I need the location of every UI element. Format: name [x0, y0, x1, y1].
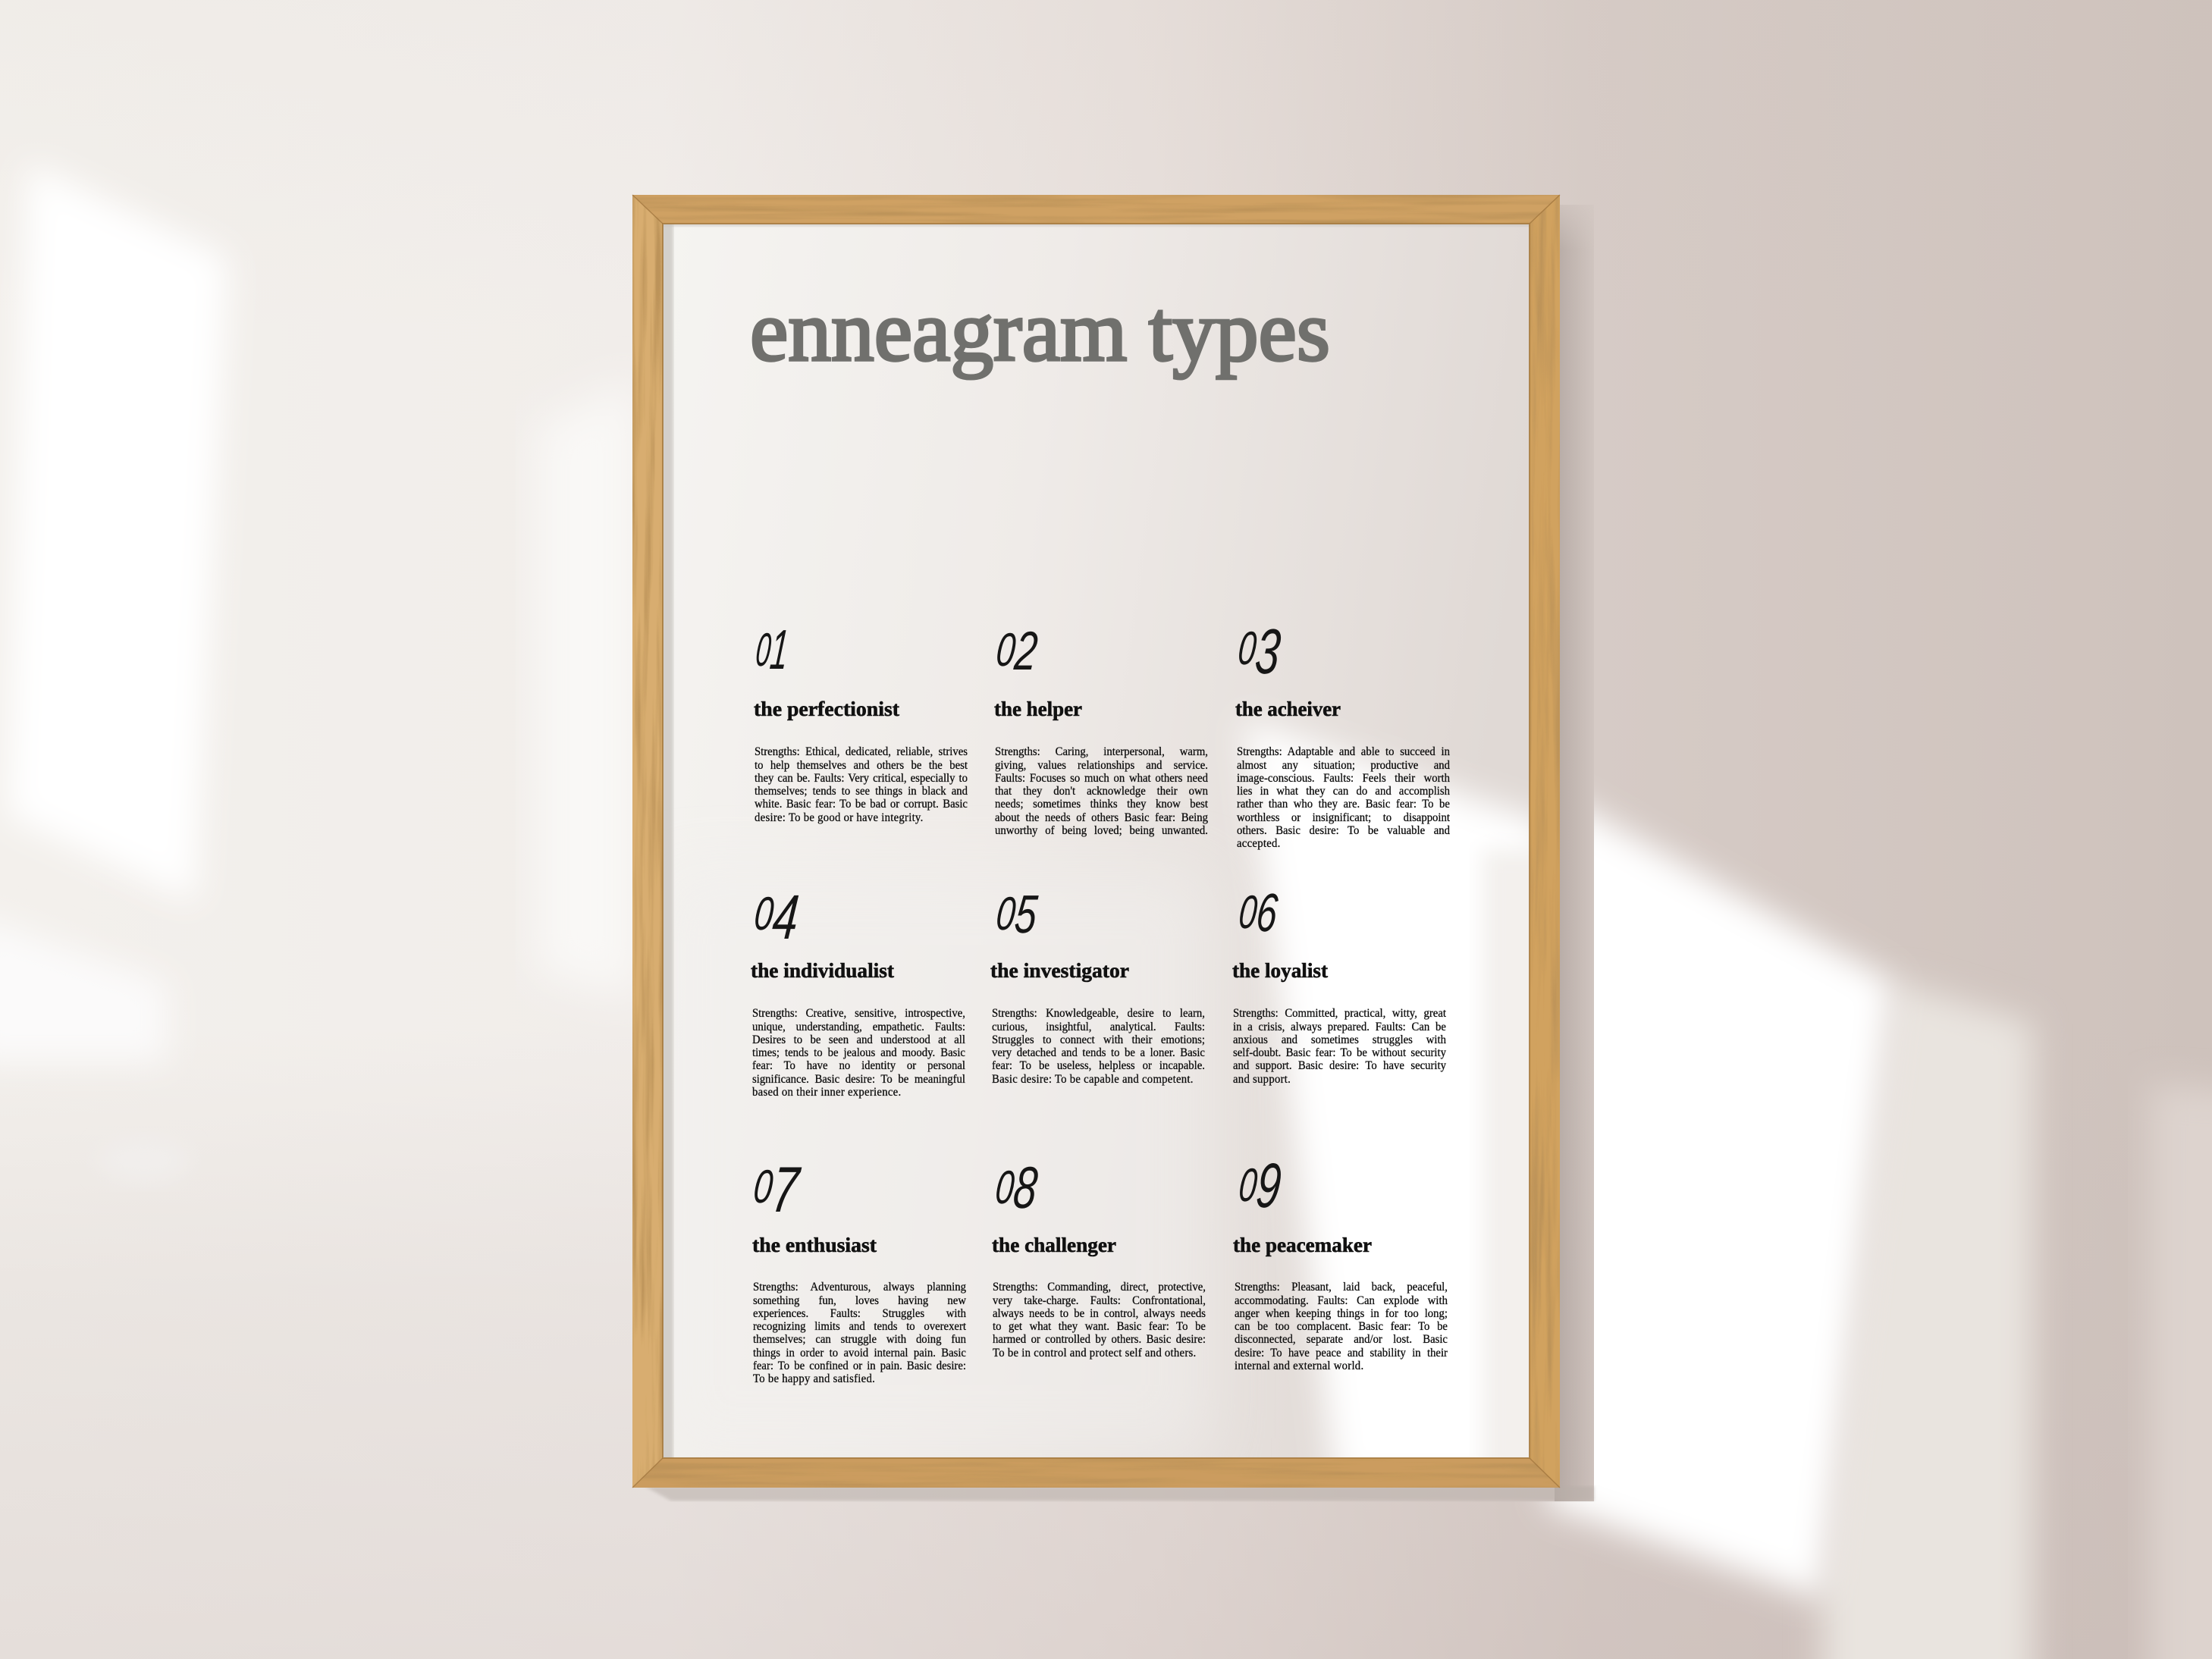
body text: Strengths: Knowledgeable, desire to learn, — [992, 1007, 1205, 1020]
number 03: 3 — [1252, 616, 1283, 688]
panel: type 03 the acheiver — [1235, 616, 1450, 850]
number 01: 0 — [754, 623, 773, 676]
body text — [993, 1281, 1206, 1360]
number 06: 6 — [1254, 883, 1280, 942]
body text: fear: To have no identity or personal — [752, 1059, 965, 1072]
body text — [1235, 1281, 1448, 1372]
number 07: 7 — [769, 1153, 804, 1225]
body text — [1236, 745, 1450, 850]
number 08: 8 — [1011, 1156, 1040, 1221]
heading: the enthusiast — [752, 1234, 877, 1256]
body text: based on their inner experience. — [752, 1086, 901, 1099]
body text: very take-charge. Faults: Confrontational, — [993, 1294, 1206, 1307]
body text: rather than who they are. Basic fear: To be — [1237, 798, 1450, 811]
body text: Strengths: Caring, interpersonal, warm, — [995, 745, 1208, 758]
body text: times; tends to be jealous and moody. Basic — [752, 1046, 965, 1059]
body text: Strengths: Commanding, direct, protective, — [993, 1281, 1206, 1294]
body text — [752, 1007, 965, 1099]
body text: disconnected, separate and/or lost. Basic — [1235, 1333, 1448, 1346]
body text: Desires to be seen and understood at all — [752, 1033, 965, 1046]
body text — [753, 1281, 966, 1385]
heading: the challenger — [992, 1234, 1116, 1256]
body text: desire: To have peace and stability in their — [1235, 1347, 1448, 1360]
body text: giving, values relationships and service. — [995, 759, 1208, 772]
body text: white. Basic fear: To be bad or corrupt. Basic — [755, 798, 968, 811]
body text: anger when keeping things in for too long; — [1235, 1307, 1448, 1320]
body text: unique, understanding, empathetic. Faults: — [752, 1021, 965, 1033]
body text: Strengths: Pleasant, laid back, peaceful, — [1235, 1281, 1448, 1294]
number 08: 0 — [993, 1162, 1017, 1214]
number 02: 0 — [994, 624, 1018, 676]
body text: image-conscious. Faults: Feels their worth — [1237, 772, 1450, 785]
panel: type 06 the loyalist — [1232, 883, 1447, 1086]
panel: type 04 the individualist — [751, 883, 965, 1099]
number 01: 1 — [767, 619, 792, 681]
body text: very detached and tends to be a loner. Basic — [992, 1046, 1205, 1059]
body text: Strengths: Committed, practical, witty, great — [1233, 1007, 1446, 1020]
body text: and support. Basic desire: To have security — [1233, 1059, 1446, 1072]
body text: internal and external world. — [1235, 1360, 1363, 1372]
number 04: 4 — [770, 883, 802, 952]
body text: Faults: Focuses so much on what others need — [995, 772, 1208, 785]
heading: the investigator — [990, 959, 1129, 982]
frame cast shadow — [645, 205, 1594, 1501]
body text: experiences. Faults: Struggles with — [753, 1307, 966, 1320]
body text: Struggles to connect with their emotions; — [992, 1033, 1205, 1046]
number 02: 2 — [1012, 621, 1040, 682]
heading: the loyalist — [1232, 959, 1328, 982]
body text: self-doubt. Basic fear: To be without security — [1233, 1046, 1446, 1059]
body text: accommodating. Faults: Can explode with — [1235, 1294, 1448, 1307]
body text: almost any situation; productive and — [1237, 759, 1450, 772]
body text: significance. Basic desire: To be meaningful — [752, 1073, 965, 1086]
body text: about the needs of others Basic fear: Being — [995, 811, 1208, 824]
body text: desire: To be good or have integrity. — [755, 811, 924, 824]
body text: they can be. Faults: Very critical, especially to — [755, 772, 968, 785]
body text: recognizing limits and tends to overexert — [753, 1320, 966, 1333]
panel: type 08 the challenger — [992, 1156, 1206, 1360]
body text: anxious and sometimes struggles with — [1233, 1033, 1446, 1046]
panel: type 05 the investigator — [990, 885, 1205, 1086]
panel: type 07 the enthusiast — [751, 1153, 966, 1385]
body text: unworthy of being loved; being unwanted. — [995, 824, 1208, 837]
body text: Strengths: Adventurous, always planning — [753, 1281, 966, 1294]
body text: others. Basic desire: To be valuable and — [1237, 824, 1450, 837]
body text: accepted. — [1237, 837, 1281, 850]
number 06: 0 — [1237, 886, 1260, 939]
body text: fear: To be useless, helpless or incapable. — [992, 1059, 1205, 1072]
body text: Strengths: Adaptable and able to succeed in — [1237, 745, 1450, 758]
body text: things in order to avoid internal pain. Basic — [753, 1347, 966, 1360]
title: enneagram types — [750, 283, 1330, 379]
number 07: 0 — [751, 1161, 775, 1213]
body text: that they don't acknowledge their own — [995, 785, 1208, 798]
number 05: 5 — [1012, 885, 1040, 945]
body text: something fun, loves having new — [753, 1294, 966, 1307]
body text: in a crisis, always prepared. Faults: Can be — [1233, 1021, 1446, 1033]
panel: type 02 the helper — [994, 621, 1208, 837]
heading: the peacemaker — [1233, 1234, 1372, 1256]
body text: lies in what they can do and accomplish — [1237, 785, 1450, 798]
body text: curious, insightful, analytical. Faults: — [992, 1021, 1205, 1033]
body text — [995, 745, 1208, 837]
body text: and support. — [1233, 1073, 1291, 1086]
heading: the helper — [994, 698, 1082, 720]
heading: the perfectionist — [754, 698, 899, 720]
body text: Basic desire: To be capable and competent. — [992, 1073, 1194, 1086]
body text: Strengths: Creative, sensitive, introspective, — [752, 1007, 965, 1020]
body text: themselves; can struggle with doing fun — [753, 1333, 966, 1346]
heading: the individualist — [751, 959, 894, 982]
panel: type 09 the peacemaker — [1227, 1160, 1454, 1388]
number 05: 0 — [994, 888, 1018, 940]
body text: Strengths: Ethical, dedicated, reliable, strives — [755, 745, 968, 758]
body text — [992, 1007, 1205, 1086]
number 04: 0 — [752, 888, 776, 940]
body text — [1233, 1007, 1447, 1086]
wooden frame — [632, 195, 1560, 1488]
body text: To be happy and satisfied. — [753, 1372, 875, 1385]
number 09: 0 — [1237, 1159, 1260, 1212]
body text: to help themselves and others be the best — [755, 759, 968, 772]
body text: To be in control and protect self and others. — [993, 1347, 1197, 1360]
heading: the acheiver — [1235, 698, 1341, 720]
poster — [660, 220, 1551, 1486]
body text: fear: To be confined or in pain. Basic desire: — [753, 1360, 966, 1372]
body text: can be too complacent. Basic fear: To be — [1235, 1320, 1448, 1333]
body text: worthless or insignificant; to disappoint — [1237, 811, 1450, 824]
number 03: 0 — [1236, 623, 1259, 675]
body text: needs; sometimes thinks they know best — [995, 798, 1208, 811]
body text: always needs to be in control, always needs — [993, 1307, 1206, 1320]
body text: harmed or controlled by others. Basic desire: — [993, 1333, 1206, 1346]
body text — [754, 745, 968, 824]
panel: type 01 the perfectionist — [754, 619, 968, 824]
body text: to get what they want. Basic fear: To be — [993, 1320, 1206, 1333]
body text: themselves; tends to see things in black and — [755, 785, 968, 798]
number 09: 9 — [1253, 1152, 1284, 1222]
